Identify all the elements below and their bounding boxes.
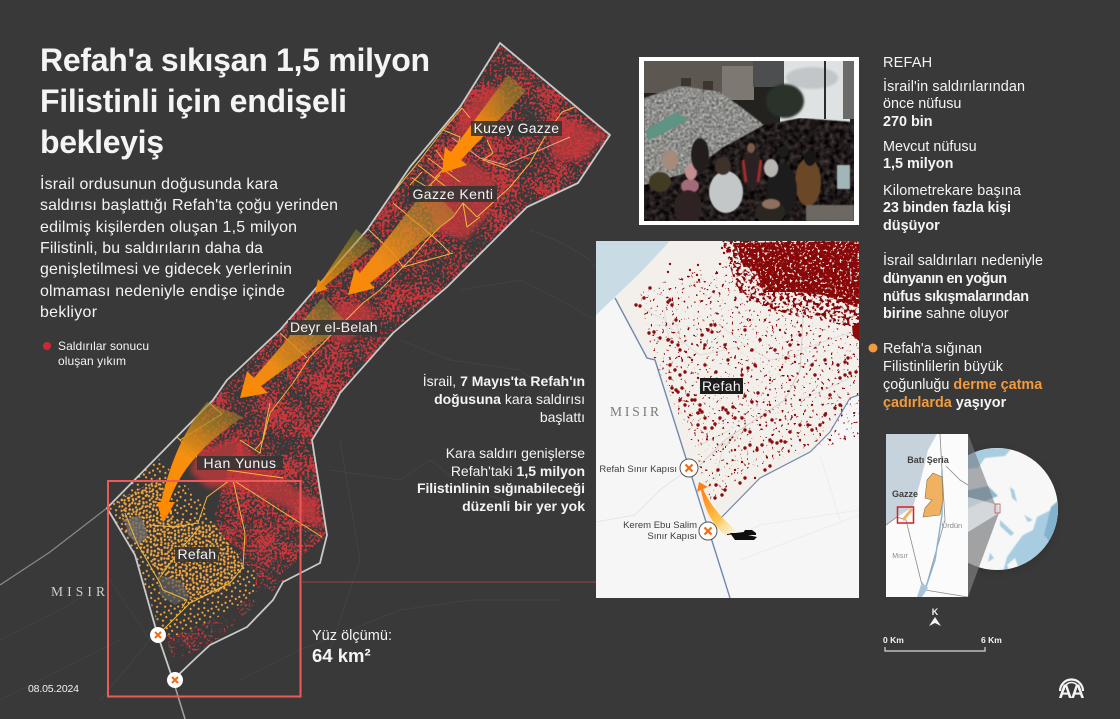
map: Gaza Strip [0, 43, 610, 719]
locator: globe [968, 448, 1058, 570]
crossing marker: Refah [150, 627, 166, 643]
info column: Refah facts: dünyanın en yoğun [883, 271, 1007, 287]
arrow: attack direction [697, 482, 738, 537]
crossing: Refah Sınır Kapısı: Refah Sınır Kapısı [599, 464, 677, 475]
info column: Refah facts: önce nüfusu [883, 96, 961, 112]
legend: destruction [43, 339, 149, 368]
info column: Refah facts: İsrail saldırıları nedeniyle [883, 251, 1043, 269]
locator: regional map: Ürdün [942, 521, 962, 530]
roads [125, 107, 575, 630]
intro text: olmaması nedeniyle endişe içinde [40, 283, 285, 300]
Mediterranean coastline [0, 508, 107, 585]
intro text: genişletilmesi ve gidecek yerlerinin [40, 261, 292, 278]
info column: Refah facts: düşüyor [883, 218, 940, 234]
title: Filistinli için endişeli [40, 83, 347, 119]
title: Refah'a sıkışan 1,5 milyon [40, 42, 430, 78]
photo: crowd beside rubble [639, 57, 859, 225]
text block: ground attack: başlattı [540, 409, 585, 425]
callout: tents: çadırlarda yaşıyor [883, 395, 1007, 411]
destruction: scatter [640, 260, 859, 500]
callout: tents: Refah'a sığınan [883, 341, 982, 357]
callout: tents: çoğunluğu derme çatma [883, 377, 1043, 393]
destruction: dense [733, 241, 859, 308]
locator: projection funnel [968, 434, 1000, 597]
intro text: bekliyor [40, 304, 98, 321]
info column: Refah facts: 23 binden fazla kişi [883, 200, 1011, 216]
info column: Refah facts: nüfus sıkışmalarından [883, 289, 1029, 305]
text block: ground attack: Refah'taki 1,5 milyon [451, 463, 585, 479]
border outline [107, 43, 610, 680]
info column: Refah facts [883, 55, 1043, 322]
intro text: İsrail ordusunun doğusunda kara [40, 174, 278, 193]
label: Refah: Refah [178, 546, 216, 562]
scale bar: 0 Km [883, 635, 904, 645]
legend: destruction: Saldırılar sonucu [58, 339, 149, 353]
area figure: 64 km² [312, 645, 371, 666]
Gaza [902, 508, 913, 521]
destruction texture [107, 43, 610, 670]
intro text: edilmiş kişilerden oluşan 1,5 milyon [40, 219, 297, 236]
date: 08.05.2024 [28, 683, 79, 695]
buildings [644, 61, 754, 93]
info column: Refah facts: İsrail'in saldırılarından [883, 77, 1025, 95]
West Bank [923, 473, 943, 517]
icon: tank [727, 530, 757, 540]
text block: ground attack: Filistinlinin sığınabileceği [417, 480, 585, 496]
label: Kuzey Gazze: Kuzey Gazze [474, 120, 560, 136]
connector line to detail map [301, 581, 596, 583]
crossing: Kerem Ebu Salim: Sınır Kapısı [647, 531, 697, 542]
sea [596, 241, 670, 315]
info column: Refah facts: 1,5 milyon [883, 156, 953, 172]
pole [824, 61, 826, 119]
intro text: saldırısı başlattığı Refah'ta çoğu yerinden [40, 197, 338, 214]
scale bar [883, 635, 1002, 651]
arrows: displacement direction [157, 75, 526, 523]
land: Gaza side [615, 241, 859, 522]
sky [780, 61, 850, 126]
title: bekleyiş [40, 124, 164, 160]
crossing marker: Kerem Ebu Salim [167, 672, 183, 688]
crossing: Kerem Ebu Salim [623, 520, 717, 542]
info column: Refah facts: Kilometrekare başına [883, 183, 1021, 199]
callout: tents [868, 341, 1043, 411]
detail map: Refah [596, 241, 859, 598]
rubble [644, 86, 764, 188]
locator: regional map: Batı Şeria [907, 455, 950, 465]
info column: Refah facts: Mevcut nüfusu [883, 139, 977, 155]
text block: ground attack: düzenli bir yer yok [462, 498, 585, 514]
area figure [312, 628, 392, 666]
tree [766, 84, 804, 118]
faint background road network [0, 230, 596, 700]
label: Gazze Kenti: Gazze Kenti [412, 186, 494, 202]
legend: destruction: oluşan yıkım [58, 354, 126, 368]
frame [898, 507, 914, 523]
scale bar: 6 Km [981, 635, 1002, 645]
logo: AA: AA [1058, 682, 1085, 703]
area figure: Yüz ölçümü: [312, 628, 392, 644]
intro text [40, 174, 338, 321]
orange population dots [161, 523, 256, 637]
label: MISIR: MISIR [51, 584, 105, 599]
text block: ground attack [417, 372, 585, 514]
north arrow [929, 607, 941, 626]
figures [649, 138, 854, 224]
locator: regional map [886, 434, 968, 597]
label: Refah inset: Refah [702, 378, 741, 394]
area frame: Refah zoom box [108, 481, 300, 696]
border line [615, 298, 730, 598]
info column: Refah facts: REFAH [883, 55, 932, 71]
Egypt border continuation [173, 680, 185, 719]
north arrow: K [932, 607, 939, 617]
label: Deyr el-Belah: Deyr el-Belah [290, 319, 378, 335]
inset roads [596, 290, 859, 560]
crossing: Kerem Ebu Salim: Kerem Ebu Salim [623, 520, 697, 531]
locator: regional map: Mısır [892, 553, 908, 560]
info column: Refah facts: birine sahne oluyor [883, 306, 1009, 322]
crossing: Refah Sınır Kapısı [599, 459, 698, 477]
text block: ground attack: doğusuna kara saldırısı [434, 391, 585, 407]
info column: Refah facts: 270 bin [883, 114, 933, 130]
locator: regional map: Gazze [892, 489, 918, 499]
label: Han Yunus: Han Yunus [204, 455, 276, 471]
intro text: Filistinli, bu saldırıların daha da [40, 240, 263, 257]
text block: ground attack: İsrail, 7 Mayıs'ta Refah'ın [423, 372, 585, 389]
crowd [644, 118, 854, 221]
callout: tents: Filistinlilerin büyük [883, 359, 1004, 375]
text block: ground attack: Kara saldırı genişlerse [446, 445, 585, 461]
title [40, 42, 430, 160]
label: MISIR inset: MISIR [610, 404, 659, 419]
